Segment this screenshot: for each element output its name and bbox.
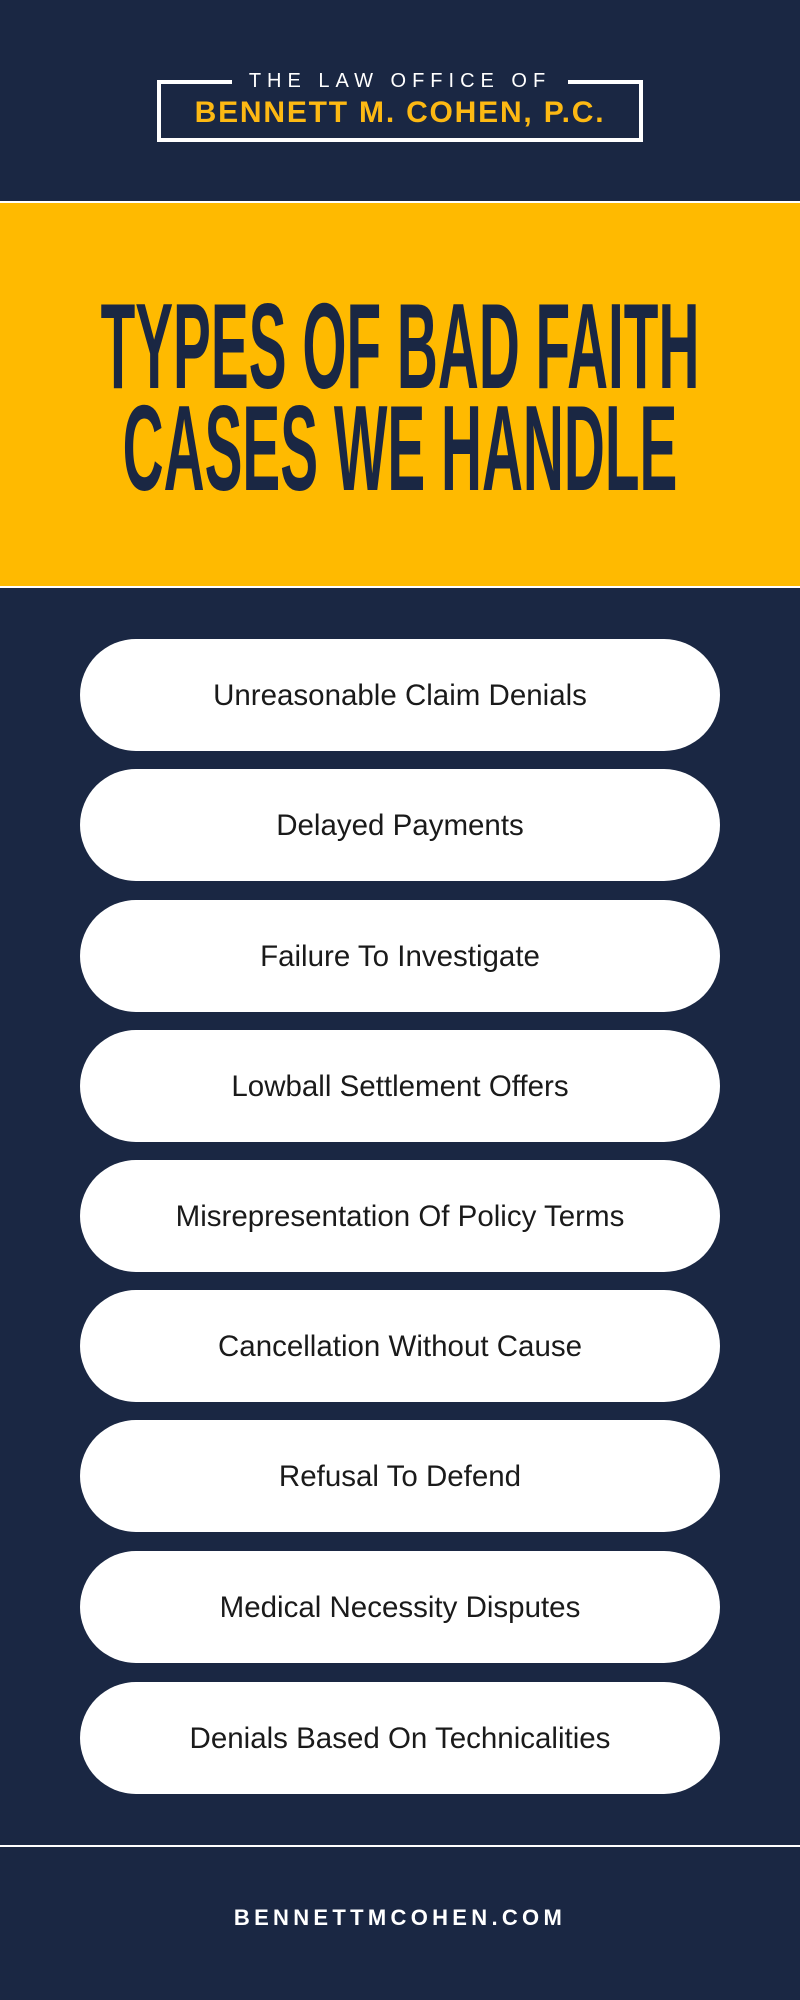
pill 6 <box>80 1290 720 1402</box>
pill 8: Medical Necessity Disputes <box>220 1591 580 1624</box>
pill 1: Unreasonable Claim Denials <box>213 679 587 712</box>
pill 5 <box>80 1160 720 1272</box>
pill 8 <box>80 1551 720 1663</box>
pill 2: Delayed Payments <box>276 809 524 842</box>
pill 2 <box>80 769 720 881</box>
pill 5: Misrepresentation Of Policy Terms <box>176 1200 624 1233</box>
title <box>101 278 699 516</box>
pill 3 <box>80 900 720 1012</box>
pill 1 <box>80 639 720 751</box>
pill 4 <box>80 1030 720 1142</box>
title: TYPES OF BAD FAITH <box>101 278 699 414</box>
logo frame <box>157 80 643 142</box>
footer url: BENNETTMCOHEN.COM <box>234 1905 566 1930</box>
pill 3: Failure To Investigate <box>260 940 540 973</box>
title: CASES WE HANDLE <box>123 380 677 516</box>
logo top text: THE LAW OFFICE OF <box>249 70 551 92</box>
pill 4: Lowball Settlement Offers <box>231 1070 569 1103</box>
pill 7 <box>80 1420 720 1532</box>
title banner <box>0 201 800 588</box>
pill 9 <box>80 1682 720 1794</box>
list of cases <box>80 639 720 1794</box>
pill 7: Refusal To Defend <box>279 1460 521 1493</box>
logo <box>157 70 643 142</box>
logo name: BENNETT M. COHEN, P.C. <box>195 96 605 129</box>
pill 9: Denials Based On Technicalities <box>190 1722 610 1755</box>
pill 6: Cancellation Without Cause <box>218 1330 582 1363</box>
